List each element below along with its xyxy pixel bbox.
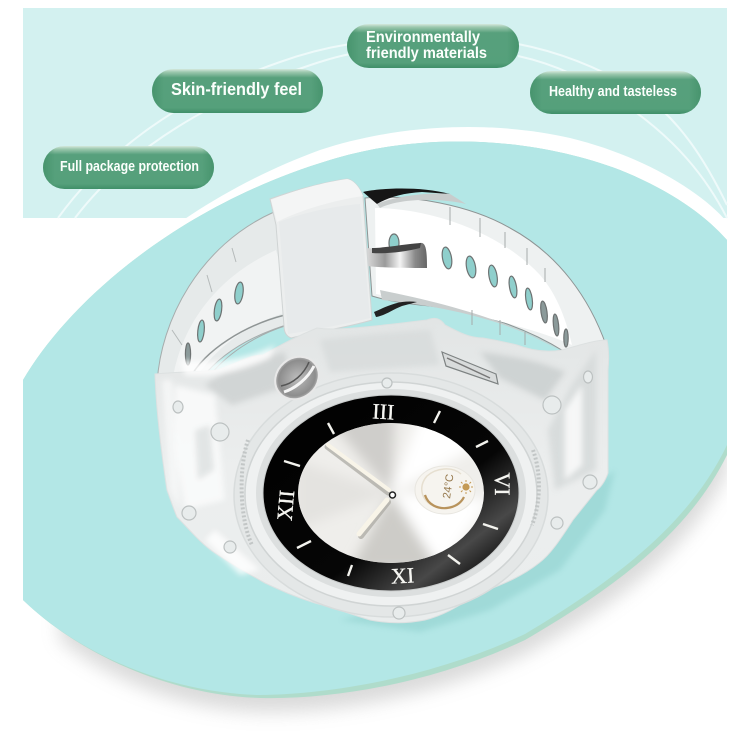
disc shadow xyxy=(54,456,727,719)
case xyxy=(155,318,609,623)
badge: skin-friendly feel: Skin-friendly feel xyxy=(171,79,302,99)
right strap xyxy=(365,197,606,352)
badge: healthy and tasteless: Healthy and tasteless xyxy=(549,84,677,100)
numerals xyxy=(272,398,515,589)
temperature widget: 24°C xyxy=(441,473,456,499)
case body xyxy=(155,318,609,623)
numerals: VI xyxy=(490,472,515,496)
badge: environmentally friendly materials: Environmentally xyxy=(366,29,480,46)
teal disc xyxy=(23,127,727,712)
numerals: III xyxy=(372,398,395,425)
hour markers xyxy=(284,411,498,576)
left strap xyxy=(157,212,296,385)
buckle pin xyxy=(367,243,427,268)
sun icon xyxy=(459,480,473,494)
watch hands xyxy=(327,445,396,536)
strap xyxy=(157,179,615,632)
disc body xyxy=(23,141,727,695)
side shading xyxy=(162,330,596,575)
badge: environmentally friendly materials xyxy=(347,24,519,68)
crown xyxy=(267,348,327,408)
badge: full package protection: Full package protection xyxy=(60,159,199,175)
screws xyxy=(173,371,597,619)
badge: full package protection xyxy=(43,146,214,189)
black ring xyxy=(263,395,519,591)
black strap end top xyxy=(363,188,450,204)
strap loop xyxy=(270,179,372,338)
numerals: XII xyxy=(272,489,299,522)
watch face xyxy=(263,395,519,591)
badge: environmentally friendly materials: friendly materials xyxy=(366,45,487,62)
decorative arcs xyxy=(58,44,727,218)
black strap end bottom xyxy=(374,302,417,317)
green lower rim xyxy=(23,141,727,698)
badge: healthy and tasteless xyxy=(530,71,701,114)
silver dial xyxy=(298,423,484,563)
smartwatch xyxy=(155,179,615,632)
engraved bezel marks xyxy=(242,440,539,545)
side button xyxy=(442,352,498,384)
temperature widget xyxy=(415,466,475,514)
bezel xyxy=(234,373,548,617)
watch shadow on disc xyxy=(340,470,615,632)
white disc rim xyxy=(186,127,724,218)
background panel xyxy=(23,8,727,218)
badge: skin-friendly feel xyxy=(152,69,323,113)
strap holes xyxy=(185,234,568,365)
numerals: XI xyxy=(390,562,415,589)
